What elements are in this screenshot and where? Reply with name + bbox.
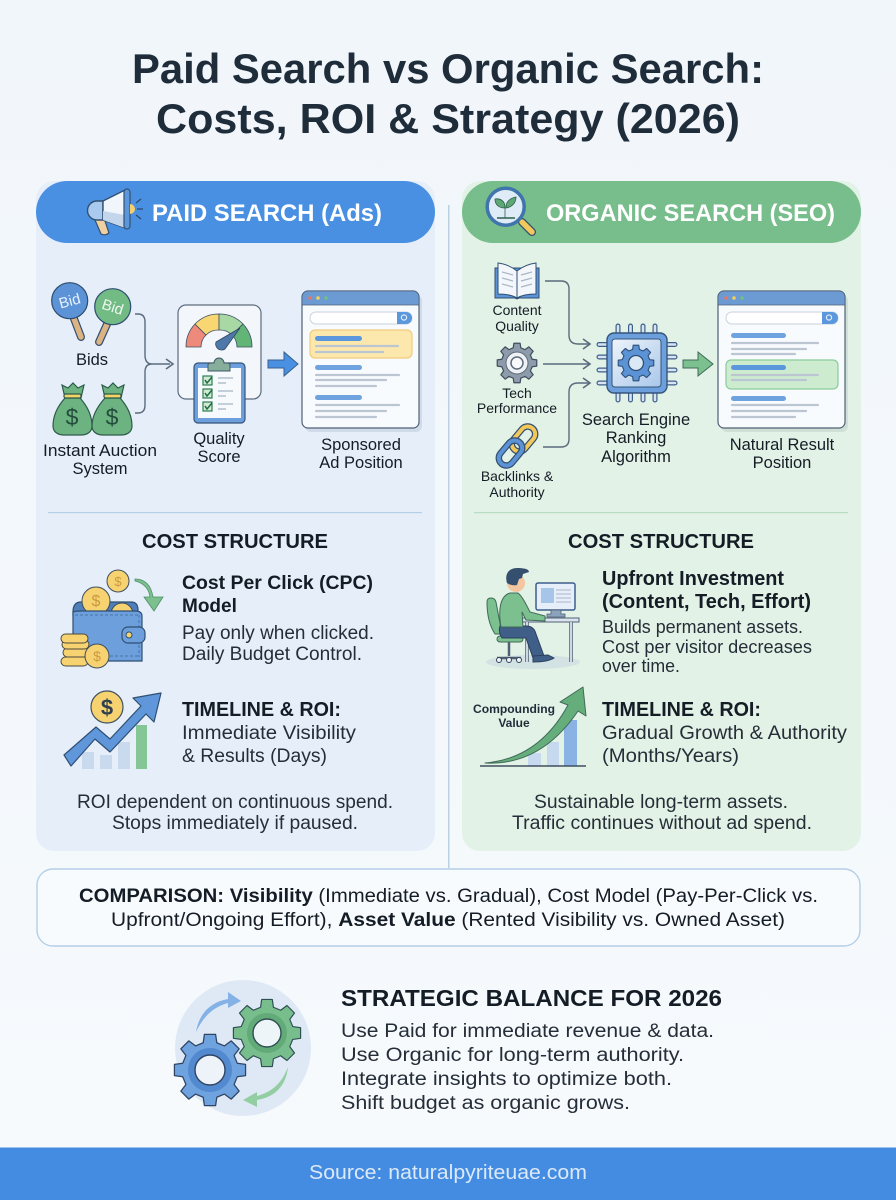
footer: Source: naturalpyriteuae.com [309,1162,587,1184]
label: sponsored ad position: Ad Position [319,454,403,472]
organic search header: ORGANIC SEARCH (SEO) [546,200,835,227]
text: upfront investment [602,568,812,676]
coin dollar marks: $ [92,593,101,610]
icon: algorithm chip [599,326,675,400]
text: timeline and roi [182,698,357,767]
icon: growth arrow with coin [64,691,161,769]
label: natural result position: Position [753,454,811,472]
title: Paid Search vs Organic Search: [132,45,764,92]
text: timeline and roi: (Months/Years) [602,746,739,767]
heading: cost structure: COST STRUCTURE [568,531,754,553]
label: search engine ranking algorithm: Search Engine [582,411,690,429]
text: cost per click: Model [182,596,237,617]
dollar signs on bags: $ [106,404,119,430]
centre divider [448,205,450,868]
icon: gauge [186,314,252,350]
comparison box: Upfront/Ongoing Effort), Asset Value (Rented Visibility vs. Owned Asset) [111,910,785,931]
footer [0,1148,896,1200]
icon: person at desk [486,568,580,669]
coin dollar marks: $ [93,648,101,664]
label: instant auction system [43,442,157,478]
arrows: factors into algorithm [543,281,590,447]
arrow: to sponsored position [268,352,298,376]
panel: organic search [462,181,861,851]
text: upfront investment: Upfront Investment [602,568,784,590]
coin dollar mark: $ [101,695,113,720]
label: quality score [193,430,245,466]
dollar signs on bags [66,404,119,430]
label: tech performance: Performance [477,400,557,416]
text: upfront investment: Cost per visitor decreases [602,637,812,657]
divider [48,512,422,513]
text: timeline and roi [602,698,848,767]
icon: gear [497,343,537,383]
text: sustainable note: Traffic continues without ad spend. [512,813,812,834]
quality score gauge card [178,305,261,423]
label: search engine ranking algorithm [582,411,690,466]
divider [474,512,848,513]
label: quality score: Quality [193,430,245,448]
paid search header: PAID SEARCH (Ads) [152,200,382,227]
browser: sponsored result [302,291,422,432]
browser: natural result [718,291,848,432]
label: search engine ranking algorithm: Algorithm [601,448,671,466]
icon: wallet with coins [61,570,163,668]
text: roi note [77,792,393,834]
text: cost per click: Pay only when clicked. [182,623,374,644]
label: natural result position: Natural Result [730,436,835,454]
dollar signs on bags: $ [66,404,79,430]
label: search engine ranking algorithm: Ranking [606,429,666,447]
text: cost per click [182,573,374,665]
heading: cost structure: COST STRUCTURE [142,531,328,553]
icon: open book [495,263,539,299]
label: instant auction system: System [72,460,128,478]
text: roi note: ROI dependent on continuous spend. [77,792,393,813]
label: backlinks and authority: Backlinks & [481,468,554,484]
icon: chain link [496,423,538,469]
icon: bid paddles: Bid [100,296,125,319]
text: roi note: Stops immediately if paused. [112,813,358,834]
text: sustainable note [512,792,812,834]
label: sponsored ad position [319,436,403,472]
text: timeline and roi: Gradual Growth & Authority [602,723,848,744]
text: strategic balance: Integrate insights to optimize both. [341,1069,672,1090]
label: bids: Bids [76,351,108,369]
label: tech performance [477,385,557,416]
text: timeline and roi: TIMELINE & ROI: [182,698,341,721]
coin dollar marks: $ [114,574,122,589]
title: Costs, ROI & Strategy (2026) [156,95,740,142]
highlighted natural result [726,360,838,389]
text: timeline and roi: Immediate Visibility [182,723,357,744]
coin dollar marks [92,574,122,664]
label: instant auction system: Instant Auction [43,442,157,460]
label: compounding value: Value [498,716,530,730]
text: upfront investment: (Content, Tech, Effort) [602,591,811,613]
label: backlinks and authority: Authority [489,484,545,500]
text: timeline and roi: TIMELINE & ROI: [602,698,761,721]
icon: bid paddles [52,283,131,342]
highlighted sponsored ad [310,330,412,358]
text: strategic balance [341,985,722,1114]
icon: magnifier with sprout [487,188,532,232]
label: compounding value: Compounding [473,702,555,716]
text: strategic balance: STRATEGIC BALANCE FOR 2026 [341,985,722,1011]
label: backlinks and authority [481,468,554,500]
text: sustainable note: Sustainable long-term assets. [534,792,788,813]
text: strategic balance: Use Organic for long-term authority. [341,1045,684,1066]
text: upfront investment: Builds permanent assets. [602,617,803,637]
text: strategic balance: Shift budget as organic grows. [341,1093,630,1114]
label: content quality: Quality [495,318,539,334]
chart: compounding value [473,687,586,766]
icon: megaphone [88,189,143,235]
icon: bid paddles: Bid [57,290,83,312]
label: tech performance: Tech [502,385,532,401]
label: natural result position [730,436,835,472]
paid search header [36,181,435,243]
label: sponsored ad position: Sponsored [321,436,401,454]
label: content quality [492,302,542,334]
comparison box [37,869,860,946]
label: content quality: Content [492,302,542,318]
icon: strategy gears [174,980,311,1116]
panel: paid search [36,181,435,851]
icon: money bags [53,383,132,435]
organic search header [462,181,861,243]
text: timeline and roi: & Results (Days) [182,746,327,767]
label: quality score: Score [197,448,241,466]
text: upfront investment: over time. [602,656,680,676]
title [132,45,764,142]
arrow: bracket into quality score [135,314,173,413]
label: compounding value [473,702,555,730]
text: strategic balance: Use Paid for immediate revenue & data. [341,1021,714,1042]
comparison box: COMPARISON: Visibility (Immediate vs. Gradual), Cost Model (Pay-Per-Click vs. [79,886,818,907]
icon: clipboard [194,358,245,423]
text: cost per click: Daily Budget Control. [182,644,362,665]
text: cost per click: Cost Per Click (CPC) [182,573,373,594]
arrow: to natural result [683,352,713,376]
